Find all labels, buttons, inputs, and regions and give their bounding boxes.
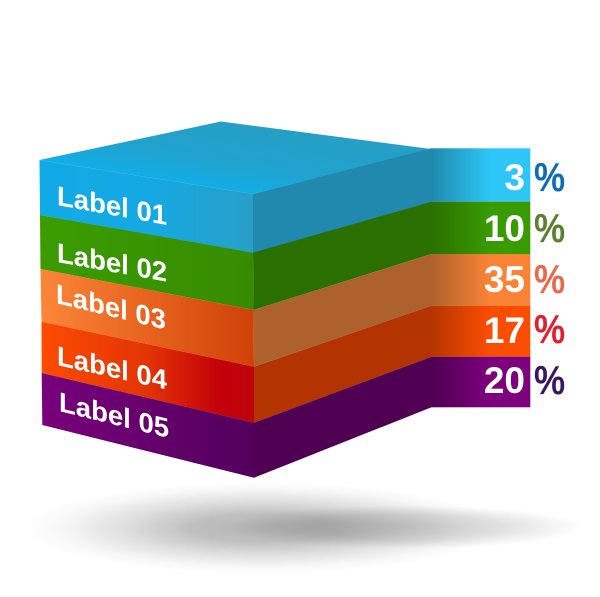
top face	[40, 122, 431, 194]
layer 1 right face	[253, 148, 432, 253]
ribbon 1	[431, 148, 530, 202]
label 04: Label 04	[57, 340, 168, 396]
percent sign 4: %	[534, 308, 565, 353]
layer 4 right face	[254, 306, 432, 423]
value 35: 35	[484, 259, 525, 300]
layer 5 front face	[42, 373, 254, 478]
percent sign 3: %	[534, 258, 565, 303]
floor shadow	[26, 482, 583, 574]
percent sign 1: %	[534, 156, 565, 201]
layer 3 front face	[40, 269, 254, 367]
layer 2 right face	[253, 202, 432, 310]
layer 5 right face	[254, 357, 432, 478]
ribbon 2	[431, 202, 530, 254]
percent sign 2: %	[534, 207, 565, 252]
percent sign 5: %	[534, 359, 565, 404]
value 10: 10	[484, 208, 525, 249]
label 05: Label 05	[59, 386, 169, 444]
value ribbons	[431, 148, 530, 407]
ribbon 3	[431, 254, 530, 306]
layer 4 front face	[42, 322, 254, 423]
value 3: 3	[504, 157, 525, 198]
ribbon 5	[431, 357, 530, 407]
3D layered block	[40, 122, 432, 478]
layer 1 front face	[40, 160, 253, 253]
value 20: 20	[484, 360, 525, 401]
value 17: 17	[484, 310, 525, 351]
label 03: Label 03	[56, 278, 166, 336]
ribbon 4	[431, 306, 530, 357]
label 02: Label 02	[57, 237, 167, 288]
layer 2 front face	[40, 215, 254, 310]
label 01: Label 01	[57, 180, 167, 231]
layer 3 right face	[254, 254, 432, 367]
